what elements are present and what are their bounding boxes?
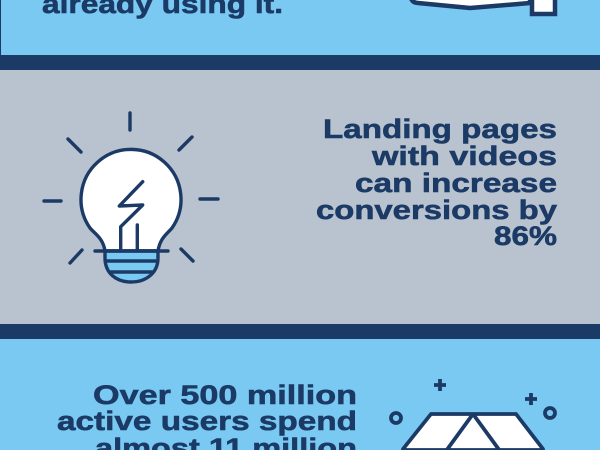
- text: landing page statistic: [316, 114, 557, 251]
- text: active users statistic: [57, 380, 357, 450]
- text: landing page statistic: 86%: [494, 221, 557, 251]
- text: active users statistic: active users spend: [57, 406, 357, 436]
- text: landing page statistic: with videos: [371, 141, 557, 171]
- text: landing page statistic: can increase: [355, 168, 557, 198]
- divider band: top: [0, 55, 600, 70]
- panel: landing pages: [0, 70, 600, 324]
- text: active users statistic: Over 500 million: [93, 380, 357, 410]
- divider band: bottom: [0, 324, 600, 339]
- text: landing page statistic: conversions by: [316, 195, 557, 225]
- panel: top video usage: [0, 0, 600, 55]
- panel: active users: [0, 339, 600, 450]
- icon: light bulb: [44, 113, 218, 282]
- text: landing page statistic: Landing pages: [323, 114, 557, 144]
- icon: partial thumbs-up: [410, 0, 555, 14]
- icon: partial open box with sparkles: [391, 379, 555, 450]
